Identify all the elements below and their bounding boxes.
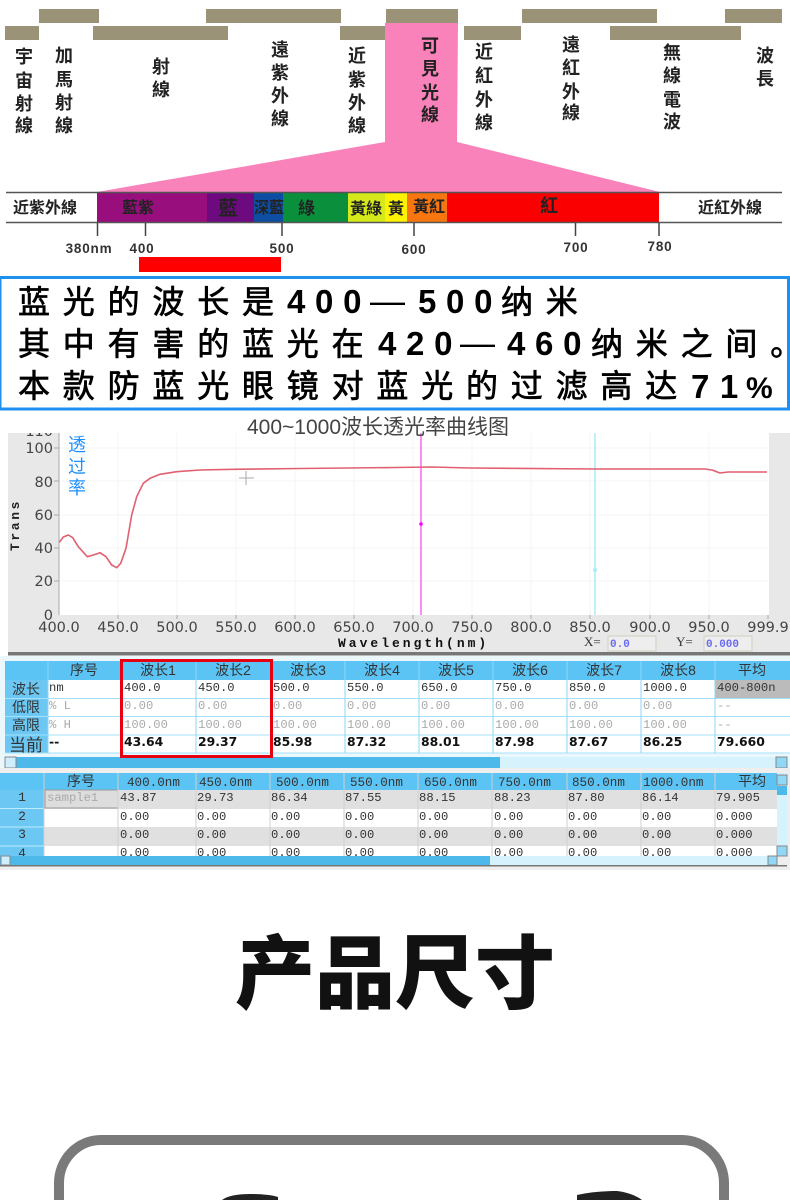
wavelength band bars [5, 9, 782, 40]
band labels: 光 [421, 83, 439, 103]
table: sample results: 0.00 [419, 810, 448, 824]
band labels: 紅 [562, 58, 580, 78]
table: sample results: 43.87 [120, 791, 157, 805]
red blue-light range bar [139, 257, 281, 272]
table: sample results: 0.00 [197, 810, 226, 824]
band labels: 無 [663, 43, 681, 63]
band labels: 線 [15, 116, 33, 136]
table: sample results: 0.00 [271, 846, 300, 860]
band labels: 線 [152, 80, 170, 100]
table: wavelength settings: 0.00 [643, 699, 672, 713]
table: wavelength settings: % H [49, 718, 71, 732]
table: wavelength settings: 波长1 [140, 662, 176, 678]
table: sample results: 650.0nm [424, 776, 477, 790]
table: wavelength settings: 100.00 [495, 718, 539, 732]
table: wavelength settings: 100.00 [569, 718, 613, 732]
callout: blue light description: 71 [691, 368, 749, 405]
table: sample results: 0.00 [345, 810, 374, 824]
table: wavelength settings: 当前 [9, 736, 43, 755]
x axis labels: 900.0 [629, 620, 671, 636]
table: wavelength settings: 波长5 [438, 662, 474, 678]
callout: blue light description: — [370, 282, 405, 321]
band labels: 波 [663, 112, 681, 132]
table: sample results: 87.55 [345, 791, 382, 805]
wavelength ticks and labels [66, 223, 672, 257]
x axis labels: 400.0 [38, 620, 80, 636]
readout boxes: X= [584, 634, 601, 649]
callout: blue light description: — [460, 324, 495, 363]
table: sample results: 0.00 [494, 810, 523, 824]
table: wavelength settings: 0.00 [124, 699, 153, 713]
wavelength ticks and labels: 400 [130, 241, 154, 256]
readout boxes: Y= [676, 634, 693, 649]
x axis labels: 650.0 [333, 620, 375, 636]
callout: blue light description: 500 [418, 283, 502, 320]
band labels [15, 35, 774, 136]
table: sample results: 88.15 [419, 791, 456, 805]
x axis labels: 999.9 [747, 620, 789, 636]
table: sample results: 0.00 [345, 846, 374, 860]
band labels: 紫 [271, 63, 289, 83]
x axis labels: 700.0 [392, 620, 434, 636]
chart: transmittance curve: Wavelength(nm) [338, 636, 489, 651]
table: sample results: 850.0nm [572, 776, 625, 790]
y axis labels: 40 [35, 541, 53, 557]
table: sample results: 450.0nm [199, 776, 252, 790]
table: sample results: 500.0nm [276, 776, 329, 790]
table: sample results: 0.00 [345, 828, 374, 842]
table: sample results: 29.73 [197, 791, 234, 805]
callout: blue light description: 本款防蓝光眼镜对蓝光的过滤高达 [18, 368, 690, 404]
x axis labels [38, 620, 789, 636]
table: sample results: 87.80 [568, 791, 605, 805]
table: sample results: 0.000 [716, 828, 753, 842]
band labels: 外 [271, 86, 289, 106]
table: wavelength settings: 序号 [70, 662, 98, 678]
band labels: 線 [348, 116, 366, 136]
callout: blue light description: 其中有害的蓝光在 [18, 326, 376, 362]
visible spectrum strip: 藍紫 [122, 199, 154, 217]
band labels: 外 [475, 90, 493, 110]
table: wavelength settings: 0.00 [569, 699, 598, 713]
table: sample results: 2 [18, 809, 26, 824]
table: sample results: 0.00 [568, 828, 597, 842]
table: wavelength settings: 0.00 [273, 699, 302, 713]
x axis labels: 750.0 [451, 620, 493, 636]
y axis labels: 0 [44, 608, 53, 624]
band labels: 加 [55, 46, 73, 66]
wavelength ticks and labels: 600 [402, 242, 426, 257]
blue axis note: 率 [68, 478, 86, 498]
table: wavelength settings: % L [49, 699, 71, 713]
table: wavelength settings: 波长4 [364, 662, 400, 678]
callout: blue light description: 纳米 [501, 284, 591, 320]
table: sample results: 0.000 [716, 810, 753, 824]
table: wavelength settings: 高限 [12, 717, 40, 733]
table: wavelength settings: 0.00 [198, 699, 227, 713]
band labels: 線 [271, 109, 289, 129]
band labels: 線 [475, 113, 493, 133]
table: wavelength settings: 87.32 [347, 734, 386, 749]
table: sample results [0, 768, 790, 870]
table: sample results: 550.0nm [350, 776, 403, 790]
right lens top [577, 1191, 642, 1200]
cursor lines [419, 433, 597, 615]
band labels: 紫 [348, 70, 366, 90]
wavelength ticks and labels: 380nm [66, 241, 112, 256]
callout: blue light description: % [746, 372, 773, 405]
x axis labels: 850.0 [569, 620, 611, 636]
readout boxes: 0.0 [610, 639, 630, 651]
band labels: 馬 [55, 70, 73, 90]
chart: transmittance curve [8, 424, 790, 656]
callout: blue light description: 420 [378, 325, 462, 362]
table: sample results: 0.00 [120, 846, 149, 860]
band labels: 長 [756, 69, 774, 89]
table: sample results: 4 [18, 846, 26, 861]
band labels: 線 [421, 105, 439, 125]
band labels: 外 [562, 82, 580, 102]
table: sample results: 0.00 [568, 810, 597, 824]
visible spectrum strip: 藍 [218, 197, 238, 220]
table: wavelength settings: 波长6 [512, 662, 548, 678]
band labels: 電 [663, 90, 681, 110]
band labels: 射 [15, 94, 33, 114]
table: wavelength settings: 波长 [12, 681, 40, 697]
table: wavelength settings: 0.00 [495, 699, 524, 713]
table: wavelength settings: 87.98 [495, 734, 534, 749]
scrollbars [0, 773, 787, 866]
x axis labels: 550.0 [215, 620, 257, 636]
left lens top [222, 1194, 278, 1200]
table: wavelength settings: 波长7 [586, 662, 622, 678]
band labels: 近 [475, 42, 493, 62]
table: wavelength settings: 低限 [12, 699, 40, 715]
table: sample results: 3 [18, 827, 26, 842]
table: wavelength settings: 100.00 [273, 718, 317, 732]
band labels: 宙 [15, 70, 33, 91]
band labels: 線 [663, 66, 681, 86]
y axis labels: 100 [25, 441, 53, 457]
table: wavelength settings: 波长3 [290, 662, 326, 678]
crosshair [239, 471, 254, 485]
table: wavelength settings: 86.25 [643, 734, 682, 749]
table: wavelength settings: 750.0 [495, 681, 532, 695]
table: sample results: 0.00 [494, 846, 523, 860]
table: wavelength settings: 400.0 [124, 681, 161, 695]
glasses frame outline [59, 1140, 724, 1200]
table: sample results: 0.00 [197, 828, 226, 842]
band labels: 外 [348, 93, 366, 113]
band labels: 線 [562, 103, 580, 123]
table: sample results: 0.00 [642, 810, 671, 824]
band labels: 射 [55, 93, 73, 113]
band labels: 波 [756, 46, 774, 66]
table: sample results: 序号 [67, 773, 95, 789]
band labels: 遠 [562, 35, 580, 55]
header row background [5, 661, 790, 680]
table: wavelength settings [0, 656, 790, 773]
axis titles: Trans [8, 499, 23, 551]
table: wavelength settings: 85.98 [273, 734, 312, 749]
table: wavelength settings: 400-800n [717, 681, 776, 695]
band labels: 射 [152, 57, 170, 77]
table: sample results: 86.34 [271, 791, 308, 805]
band labels: 可 [421, 36, 439, 56]
table: wavelength settings: 500.0 [273, 681, 310, 695]
table: sample results: 0.00 [568, 846, 597, 860]
band labels: 見 [421, 59, 439, 79]
y axis labels [26, 433, 52, 620]
y axis labels: 60 [35, 508, 53, 524]
callout: blue light description: 400 [287, 283, 371, 320]
table: sample results: 0.000 [716, 846, 753, 860]
table: wavelength settings: 650.0 [421, 681, 458, 695]
table: sample results: 0.00 [120, 828, 149, 842]
callout: blue light description [0, 278, 790, 409]
table: wavelength settings: 波长8 [660, 662, 696, 678]
table: sample results: 0.00 [642, 828, 671, 842]
visible spectrum strip: 近紅外線 [698, 198, 762, 217]
table: wavelength settings: 100.00 [198, 718, 242, 732]
callout: blue light description: 蓝光的波长是 [18, 284, 287, 320]
scrollbar [5, 757, 787, 768]
table: sample results: 平均 [738, 773, 766, 789]
chart title: 400~1000波长透光率曲线图 [247, 416, 509, 439]
x axis labels: 450.0 [97, 620, 139, 636]
wavelength ticks and labels: 780 [648, 239, 672, 254]
band labels: 遠 [271, 40, 289, 60]
table: wavelength settings: 550.0 [347, 681, 384, 695]
red highlight box [122, 660, 272, 756]
visible spectrum strip [6, 192, 782, 223]
table: sample results: 0.00 [271, 810, 300, 824]
table: sample results: 0.00 [419, 846, 448, 860]
table: sample results: 0.00 [494, 828, 523, 842]
visible spectrum strip: 黃紅 [413, 197, 445, 216]
band labels: 近 [348, 46, 366, 66]
table: sample results: 79.905 [716, 791, 760, 805]
table: wavelength settings: -- [717, 718, 732, 732]
table: sample results: 1000.0nm [643, 776, 703, 790]
table: wavelength settings: 43.64 [124, 734, 164, 749]
table: sample results: 750.0nm [498, 776, 551, 790]
x axis labels: 600.0 [274, 620, 316, 636]
table: wavelength settings: 450.0 [198, 681, 235, 695]
table: wavelength settings: 0.00 [347, 699, 376, 713]
x axis labels: 500.0 [156, 620, 198, 636]
heading: product size: 产品尺寸 [235, 930, 555, 1019]
table: wavelength settings: 88.01 [421, 734, 460, 749]
readout boxes [584, 634, 752, 651]
visible spectrum strip: 深藍 [254, 199, 284, 217]
y axis labels: 20 [35, 574, 53, 590]
blue axis note: 过 [68, 457, 86, 477]
visible spectrum strip: 紅 [540, 196, 558, 216]
table: wavelength settings: 0.00 [421, 699, 450, 713]
axis lines [54, 433, 768, 619]
x axis labels: 800.0 [510, 620, 552, 636]
visible spectrum strip: 綠 [298, 198, 315, 218]
table: wavelength settings: 100.00 [643, 718, 687, 732]
table: wavelength settings: 29.37 [198, 734, 237, 749]
wavelength ticks and labels: 500 [270, 241, 294, 256]
visible light funnel [97, 23, 660, 192]
callout: blue light description: 460 [507, 325, 591, 362]
table: wavelength settings: 79.660 [717, 734, 765, 749]
table: wavelength settings: -- [717, 699, 732, 713]
table: sample results: 0.00 [642, 846, 671, 860]
table: wavelength settings: 87.67 [569, 734, 608, 749]
table: sample results: 1 [18, 790, 26, 805]
table: sample results: 0.00 [271, 828, 300, 842]
table: sample results: 88.23 [494, 791, 531, 805]
band labels: 宇 [15, 47, 33, 67]
table: wavelength settings: nm [49, 681, 64, 695]
table: sample results: 0.00 [120, 810, 149, 824]
table: sample results: 0.00 [419, 828, 448, 842]
table: wavelength settings: 波长2 [215, 662, 251, 678]
visible spectrum strip: 黃 [388, 200, 404, 218]
table: wavelength settings: 1000.0 [643, 681, 687, 695]
table: wavelength settings: 平均 [738, 662, 766, 678]
table: wavelength settings: 100.00 [421, 718, 465, 732]
wavelength ticks and labels: 700 [564, 240, 588, 255]
table: wavelength settings: 100.00 [347, 718, 391, 732]
visible spectrum strip: 黃綠 [350, 199, 382, 218]
table: sample results: 0.00 [197, 846, 226, 860]
table: wavelength settings: 850.0 [569, 681, 606, 695]
table: wavelength settings: -- [49, 734, 59, 749]
x axis labels: 950.0 [688, 620, 730, 636]
band labels: 線 [55, 116, 73, 136]
band labels: 紅 [475, 66, 493, 86]
readout boxes: 0.000 [706, 639, 739, 651]
blue axis note: 透 [68, 435, 86, 455]
curve [59, 467, 767, 568]
table: sample results: 400.0nm [127, 776, 180, 790]
panel: electromagnetic spectrum [5, 9, 782, 272]
table: sample results: 86.14 [642, 791, 679, 805]
y axis labels: 80 [35, 475, 53, 491]
visible spectrum strip: 近紫外線 [13, 198, 77, 217]
y axis labels: 110 [25, 424, 53, 440]
table: wavelength settings: 100.00 [124, 718, 168, 732]
blue axis note [68, 435, 86, 498]
table: sample results: sample1 [47, 791, 98, 805]
